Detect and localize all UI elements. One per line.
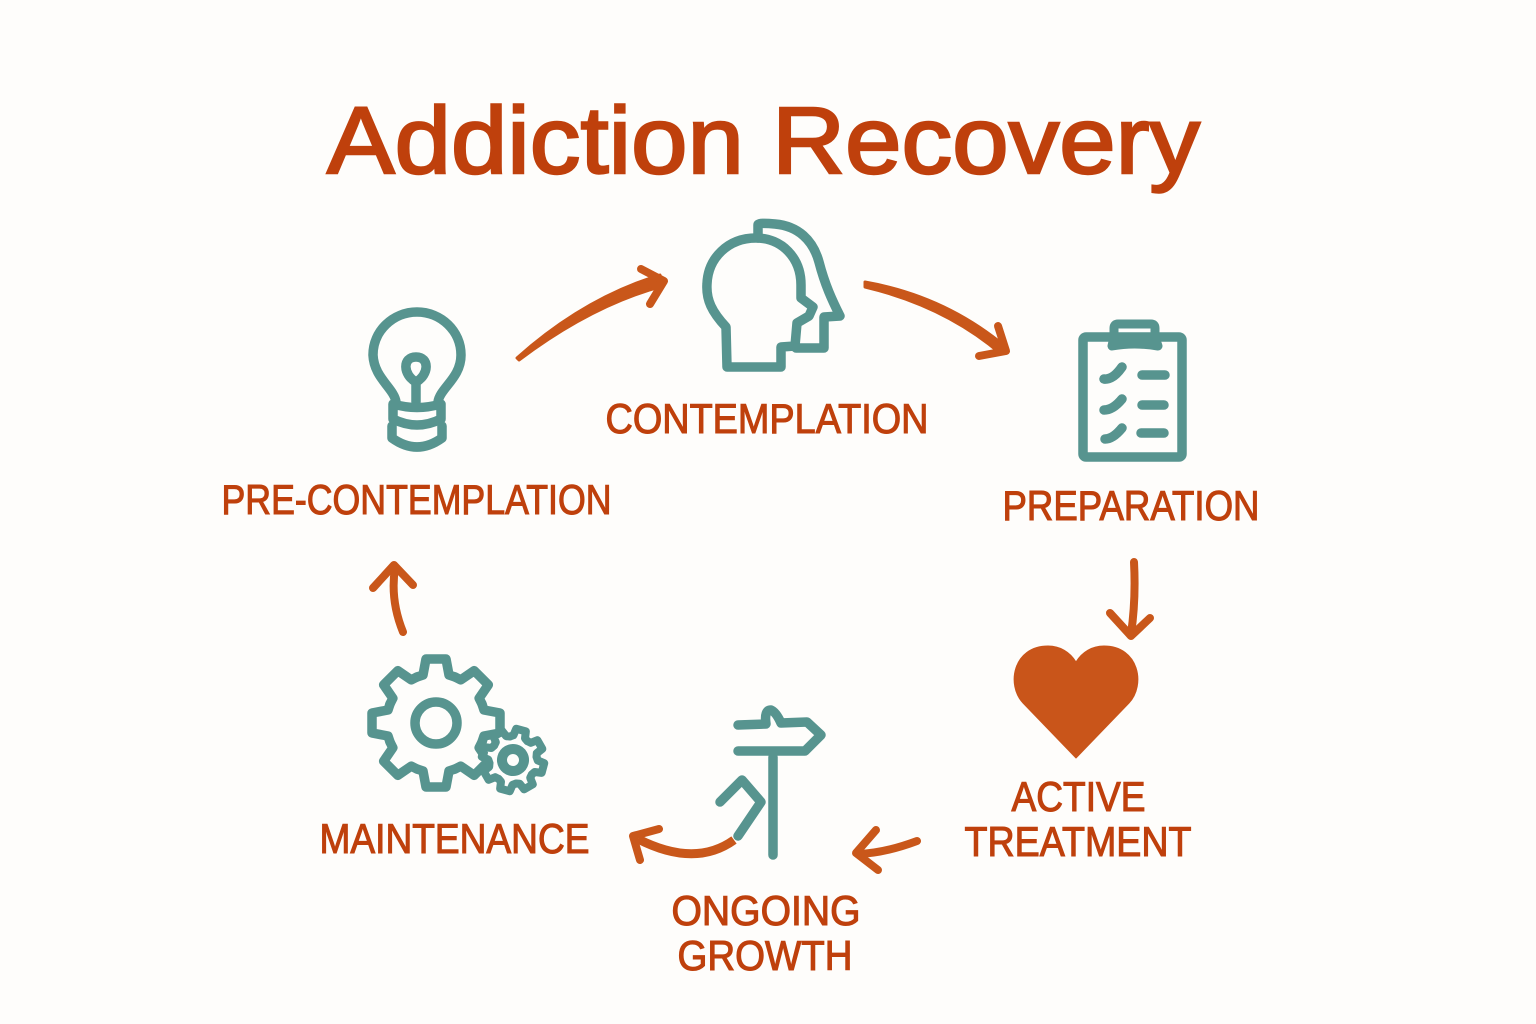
arrow: maintenance to pre-contemplation xyxy=(373,565,413,632)
label: active treatment xyxy=(964,773,1192,865)
label: active treatment: ACTIVE xyxy=(1012,773,1146,820)
stage: preparation xyxy=(1002,324,1260,529)
label: preparation: PREPARATION xyxy=(1002,482,1260,529)
label: pre-contemplation: PRE-CONTEMPLATION xyxy=(222,476,612,523)
stage: maintenance xyxy=(320,659,590,862)
arrow: contemplation to preparation xyxy=(865,282,1006,356)
icon: gears xyxy=(372,659,551,798)
arrow: pre-contemplation to contemplation xyxy=(517,269,664,360)
icon: heart xyxy=(1014,646,1138,758)
arrow: preparation to active treatment xyxy=(1110,562,1150,636)
icon: light bulb xyxy=(373,312,461,447)
stage: ongoing growth xyxy=(672,710,860,979)
stage: contemplation xyxy=(606,223,928,442)
stage: pre-contemplation xyxy=(222,312,612,523)
icon: small gear xyxy=(475,722,551,798)
title: Addiction Recovery xyxy=(327,88,1201,194)
label: ongoing growth: ONGOING xyxy=(672,887,860,934)
icon: clipboard xyxy=(1083,324,1182,457)
arrow: active treatment to ongoing growth xyxy=(856,830,917,870)
label: active treatment: TREATMENT xyxy=(964,818,1192,865)
label: maintenance: MAINTENANCE xyxy=(320,815,590,862)
icon: signpost xyxy=(720,710,821,855)
icon: two heads xyxy=(707,223,840,367)
arrow: ongoing growth to maintenance xyxy=(633,829,734,860)
label: ongoing growth xyxy=(672,887,860,979)
stage: active treatment xyxy=(964,646,1192,865)
label: ongoing growth: GROWTH xyxy=(678,932,852,979)
icon: large gear xyxy=(372,659,500,787)
label: contemplation: CONTEMPLATION xyxy=(606,395,928,442)
